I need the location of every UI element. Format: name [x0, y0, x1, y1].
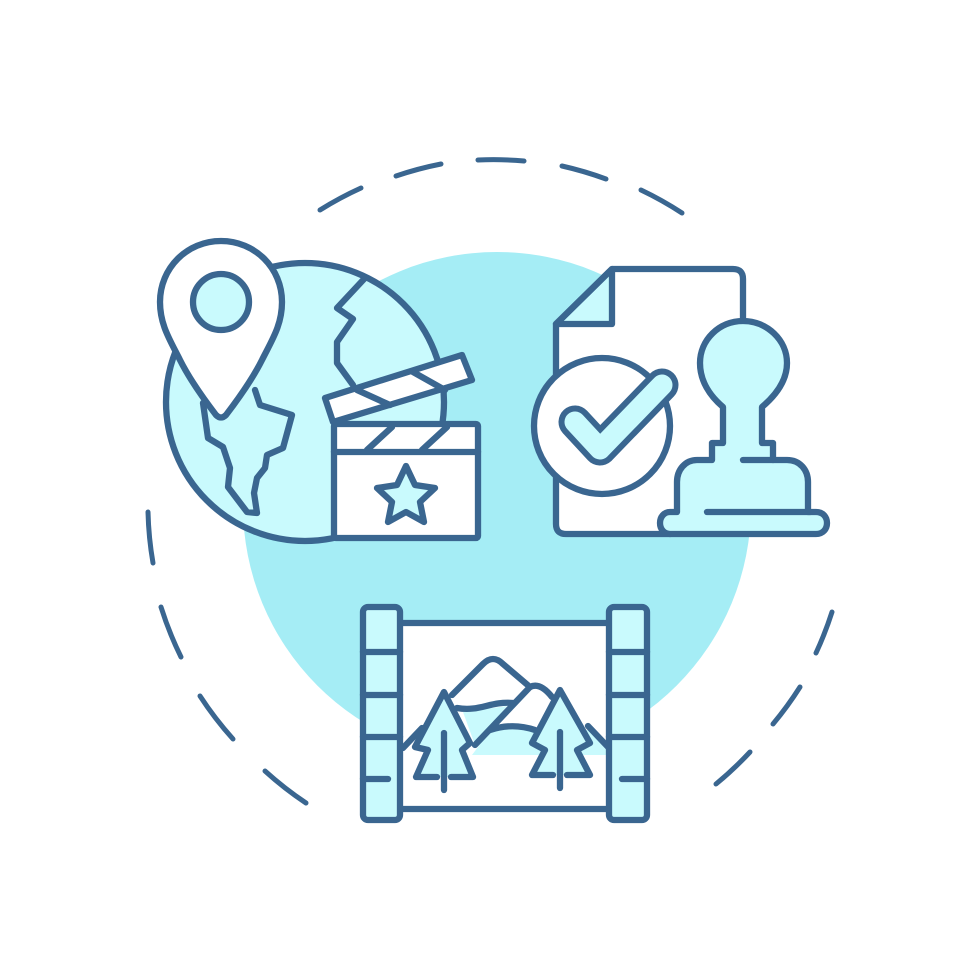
document — [556, 269, 743, 534]
icon: location pin — [160, 241, 282, 418]
right pine tree — [532, 690, 590, 788]
right film perforation strip — [609, 607, 647, 820]
left pine tree — [415, 692, 473, 790]
icon: globe with location pin and clapperboard — [160, 241, 478, 541]
left film perforation strip — [363, 607, 400, 820]
background circle — [243, 252, 751, 760]
icon: film strip with mountain landscape — [363, 607, 647, 820]
approval check mark — [534, 358, 670, 494]
icon: approved document with stamp — [534, 269, 827, 534]
mountain scene — [403, 659, 609, 755]
film frame — [398, 623, 612, 809]
globe — [166, 263, 444, 541]
dashed ring — [148, 160, 832, 803]
rubber stamp — [660, 321, 827, 534]
icon: clapperboard — [325, 355, 478, 538]
